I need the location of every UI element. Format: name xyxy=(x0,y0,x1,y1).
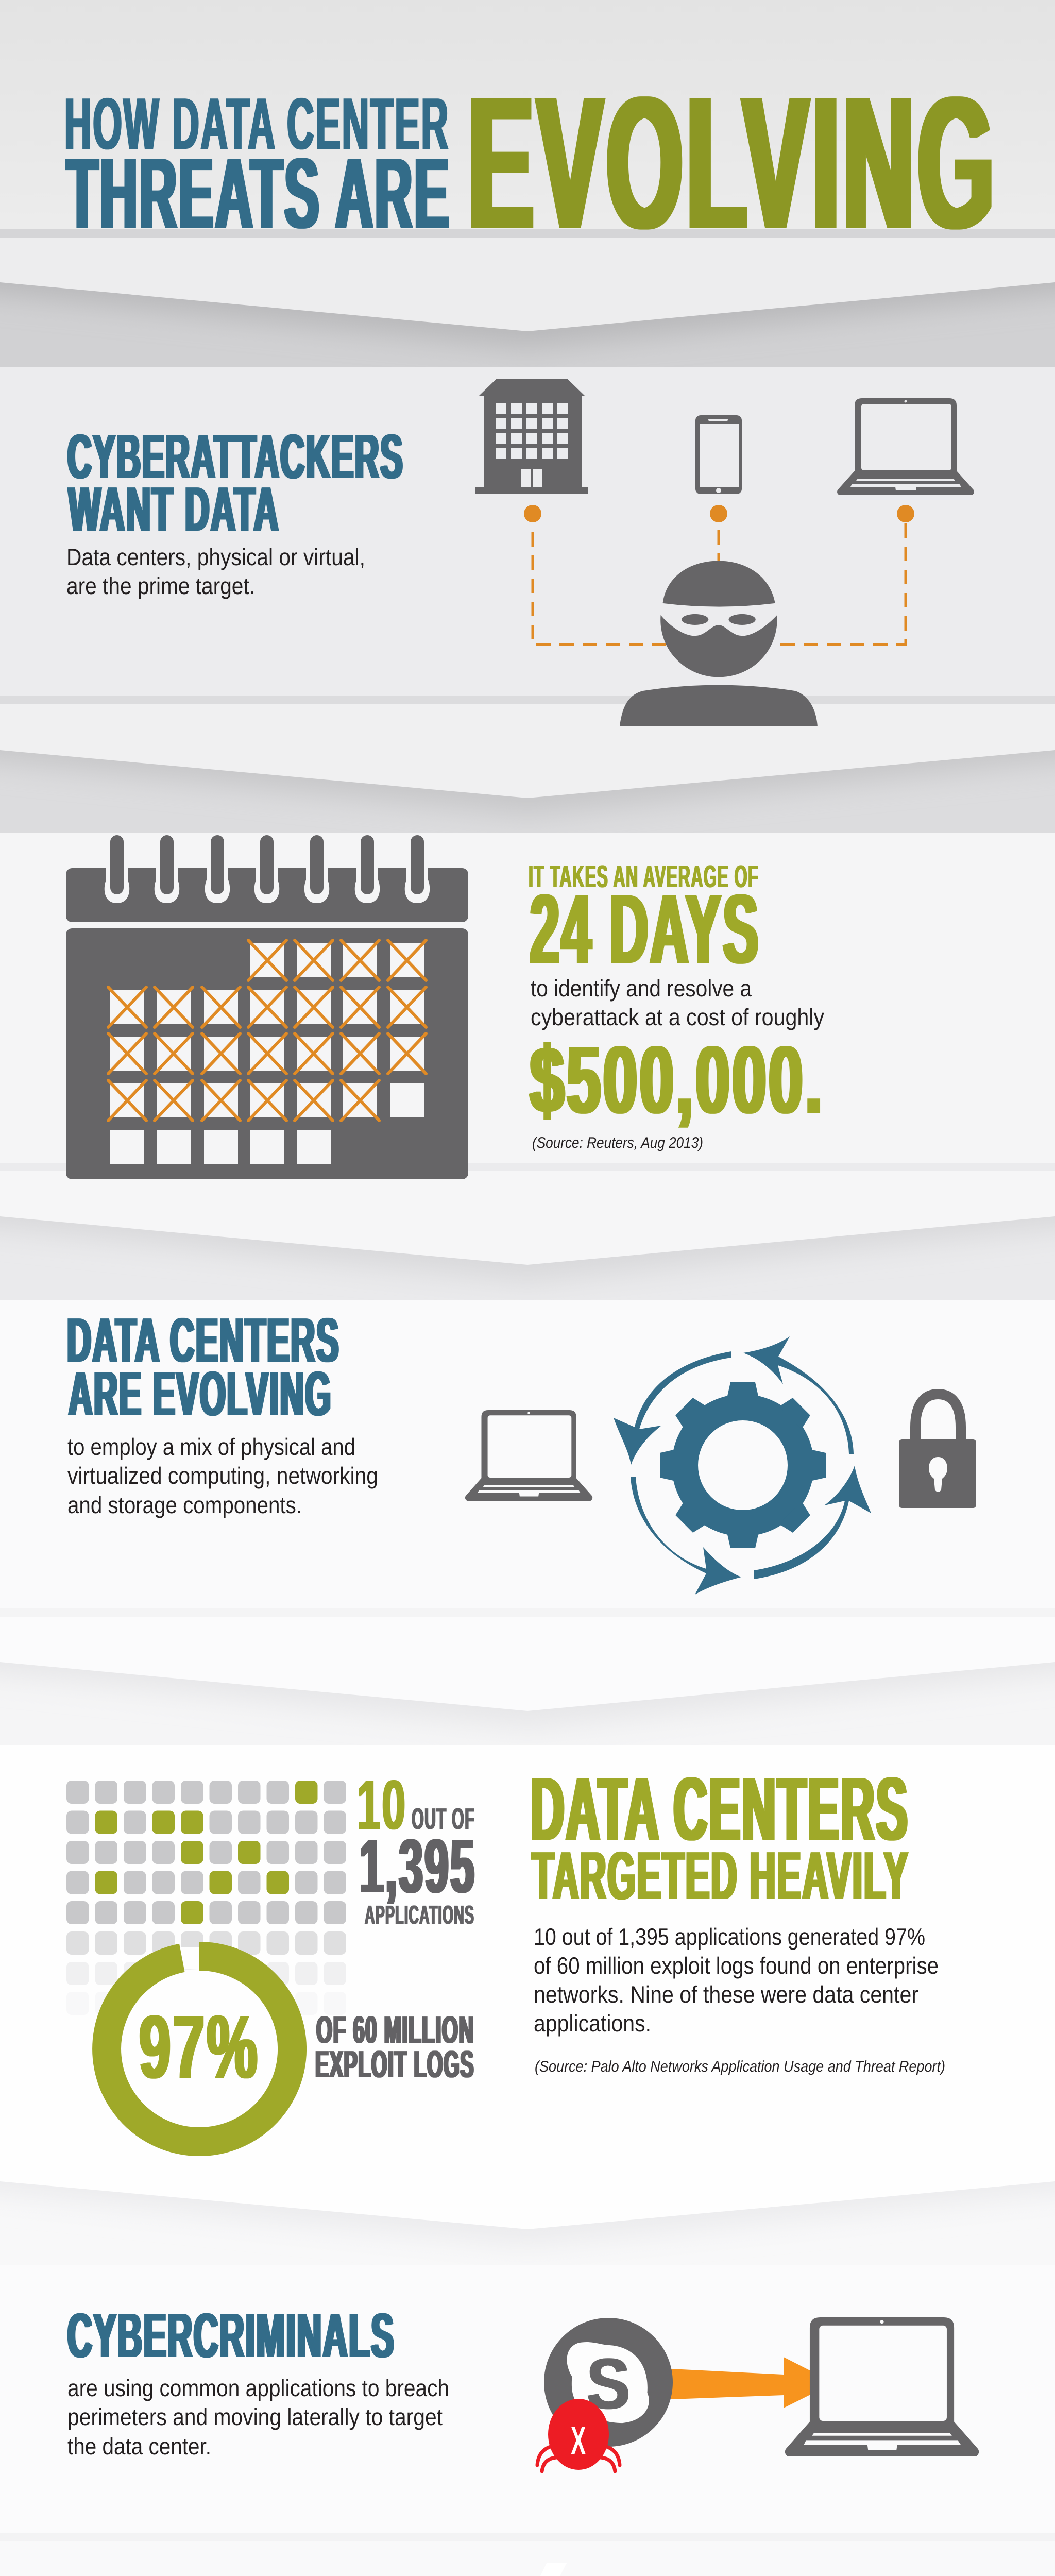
chart: 97% donut xyxy=(107,1947,292,2142)
text: common applications xyxy=(67,2375,449,2460)
heading: cyberattackers: CYBERATTACKERS xyxy=(67,421,404,492)
title xyxy=(64,58,998,268)
heading: cyberattackers: WANT DATA xyxy=(69,474,280,544)
heading: data centers are evolving: DATA CENTERS xyxy=(67,1305,340,1375)
text: exploit log description: of 60 million exploit logs found on enterprise xyxy=(534,1952,939,1979)
text: average cost of a cyberattack: IT TAKES AN AVERAGE OF xyxy=(529,859,759,894)
text: exploit log description xyxy=(534,1923,939,2037)
icon: data center building xyxy=(475,379,588,494)
text: data centers are the prime target: Data centers, physical or virtual, xyxy=(66,544,365,570)
text: common applications: are using common applications to breach xyxy=(67,2375,449,2401)
text: of 60 million exploit logs: EXPLOIT LOGS xyxy=(315,2043,474,2086)
icon: circular arrows xyxy=(614,1336,871,1595)
text: exploit log description: applications. xyxy=(534,2010,651,2037)
heading: data centers targeted heavily xyxy=(531,1758,909,1913)
icon: laptop xyxy=(837,398,974,495)
icon: gear xyxy=(660,1382,826,1548)
text: common applications: perimeters and moving laterally to target xyxy=(67,2403,443,2430)
title: HOW DATA CENTER xyxy=(64,83,450,165)
panel: cybercriminals xyxy=(67,2300,979,2471)
text: 10 out of 1,395 applications: APPLICATIONS xyxy=(365,1900,474,1929)
text: average cost of a cyberattack xyxy=(529,859,825,1151)
arrow: orange arrow xyxy=(671,2357,834,2408)
text: mix of components xyxy=(67,1433,378,1518)
chart: application dot grid xyxy=(66,1781,346,2015)
icon: skype application: S xyxy=(587,2343,633,2424)
text: data centers are the prime target: are the prime target. xyxy=(66,572,255,599)
text: average cost of a cyberattack: cyberattack at a cost of roughly xyxy=(531,1004,824,1030)
connector: dashed orange lines xyxy=(533,523,906,645)
panel: 24 days xyxy=(66,835,825,1179)
text: 10 out of 1,395 applications xyxy=(357,1766,476,1929)
text: of 60 million exploit logs: OF 60 MILLION xyxy=(316,2008,474,2051)
icon: padlock xyxy=(899,1394,976,1508)
icon: laptop xyxy=(785,2317,979,2456)
heading: cyberattackers xyxy=(67,421,404,544)
panel: data centers are evolving xyxy=(67,1305,976,1595)
icon: masked thief xyxy=(620,561,818,726)
icon: skype application xyxy=(544,2318,673,2447)
text: data centers are the prime target xyxy=(66,544,365,599)
text: exploit log description: networks. Nine of these were data center xyxy=(534,1981,918,2008)
text: mix of components: and storage components. xyxy=(67,1492,302,1518)
panel: cyberattackers want data xyxy=(66,379,974,726)
icon: red malware bug xyxy=(537,2399,620,2471)
text: source citation: (Source: Palo Alto Networks Application Usage and Threat Report) xyxy=(535,2058,945,2075)
icon: smartphone xyxy=(695,415,742,494)
title: THREATS ARE xyxy=(66,138,451,249)
icon: orange connector dots xyxy=(524,505,914,522)
chart: 97% donut: 97% xyxy=(139,1996,260,2097)
heading: cybercriminals: CYBERCRIMINALS xyxy=(67,2300,395,2370)
text: mix of components: virtualized computing, networking xyxy=(67,1462,378,1489)
text: average cost of a cyberattack: $500,000. xyxy=(530,1027,825,1133)
text: 10 out of 1,395 applications: 10 xyxy=(357,1766,407,1844)
text: 10 out of 1,395 applications: OUT OF xyxy=(412,1802,475,1836)
text: average cost of a cyberattack: to identify and resolve a xyxy=(531,975,752,1002)
text: common applications: the data center. xyxy=(67,2433,211,2460)
heading: data centers are evolving: ARE EVOLVING xyxy=(69,1359,332,1429)
icon: calendar xyxy=(66,835,468,1179)
panel: data centers targeted heavily xyxy=(66,1758,945,2142)
text: exploit log description: 10 out of 1,395 applications generated 97% xyxy=(534,1923,925,1950)
heading: data centers are evolving xyxy=(67,1305,340,1429)
text: of 60 million exploit logs xyxy=(315,2008,474,2086)
text: average cost of a cyberattack: (Source: Reuters, Aug 2013) xyxy=(532,1134,703,1151)
icon: red malware bug: X xyxy=(571,2419,587,2463)
text: mix of components: to employ a mix of physical and xyxy=(67,1433,355,1460)
icon: laptop xyxy=(465,1410,592,1501)
text: average cost of a cyberattack: 24 DAYS xyxy=(530,874,760,984)
text: 10 out of 1,395 applications: 1,395 xyxy=(360,1824,476,1909)
